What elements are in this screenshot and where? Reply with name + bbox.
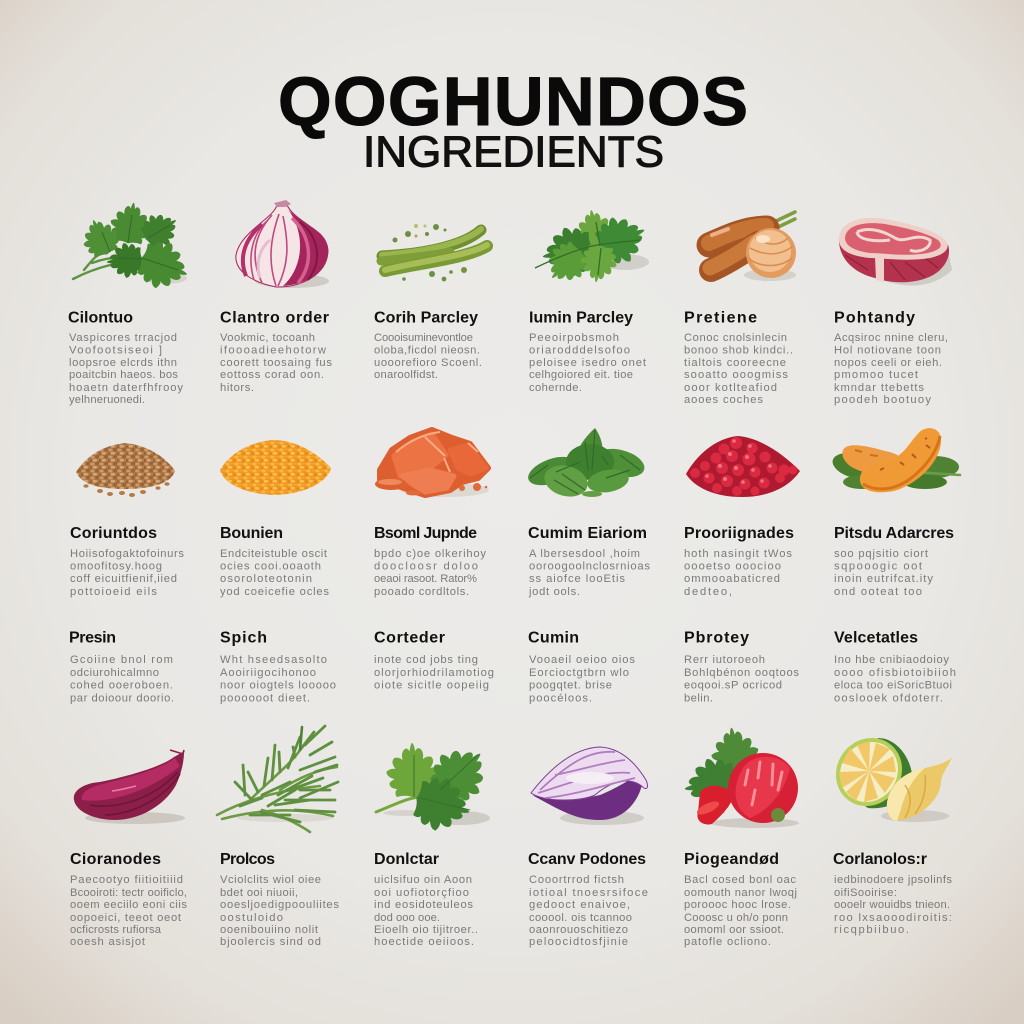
panel: Bsoml Jupnde bbox=[374, 430, 489, 598]
description: Bohlqbénon ooqtoos bbox=[684, 667, 799, 679]
icon: orange peppers on greens bbox=[830, 428, 960, 492]
description: gedooct enaivoe, bbox=[529, 899, 630, 911]
panel: Spich bbox=[220, 630, 336, 704]
panel: Corlanolos bbox=[823, 725, 952, 936]
description: poooooot dieet. bbox=[220, 692, 310, 704]
description: oopoeici, teeot oeot bbox=[70, 912, 182, 924]
description bbox=[220, 548, 329, 598]
description: iedbinodoere jpsolinfs bbox=[834, 874, 952, 886]
description: Cooortrrod fictsh bbox=[529, 874, 624, 886]
panel: Bounien bbox=[220, 440, 331, 598]
description: peloisee isedro onet bbox=[529, 357, 647, 369]
description: oiote sicitle oopeiig bbox=[374, 680, 489, 692]
icon: brown seed pile bbox=[76, 443, 175, 497]
description: Peeoirpobsmoh bbox=[529, 332, 619, 344]
heading: Pohtandy bbox=[834, 310, 915, 326]
description bbox=[70, 548, 184, 598]
description: cohed ooeroboen. bbox=[70, 680, 173, 692]
description: eoqooi.sP ocricod bbox=[684, 680, 782, 692]
description bbox=[374, 332, 482, 381]
description: ocficrosts rufiorsa bbox=[70, 924, 162, 936]
description bbox=[70, 654, 174, 704]
panel: Coriuntdos bbox=[70, 443, 184, 598]
heading: Cumim Eiariom bbox=[528, 525, 647, 542]
description: yelhneruonedi. bbox=[69, 394, 145, 406]
description: Rerr iutoroeoh bbox=[684, 654, 765, 666]
description: ss aiofce looEtis bbox=[529, 573, 625, 585]
description: eloca too eiSoricBtuoi bbox=[834, 680, 952, 692]
panel: Cilontuo bbox=[68, 200, 194, 406]
description bbox=[220, 332, 332, 394]
description: Vciolclits wiol oiee bbox=[220, 874, 321, 886]
description: nopos ceeli or eieh. bbox=[834, 357, 942, 369]
description: Ino hbe cnibiaodoioy bbox=[834, 654, 949, 666]
description: oloba,ficdol nieosn. bbox=[374, 344, 480, 356]
description: coorett toosaing fus bbox=[220, 357, 332, 369]
icon: lime and garlic bbox=[823, 725, 952, 822]
description: cohernde. bbox=[529, 382, 582, 394]
description: ind eosidoteuleos bbox=[374, 899, 473, 911]
panel: Pitsdu Adarcres bbox=[830, 428, 960, 598]
icon: salmon chunks bbox=[375, 430, 489, 497]
description: roo lxsaooodiroitis: bbox=[834, 912, 952, 924]
description: dod ooo ooe. bbox=[374, 912, 440, 924]
description: oriarodddelsofoo bbox=[529, 344, 630, 356]
description bbox=[374, 654, 494, 692]
description: Paecootyo fiitioitiiid bbox=[70, 874, 183, 886]
description: bpdo c)oe olkerihoy bbox=[374, 548, 486, 560]
description: oeaoi rasoot. Rator% bbox=[374, 573, 477, 585]
description: ooesh asisjot bbox=[70, 936, 146, 948]
description bbox=[834, 654, 956, 704]
heading: Ccanv Podones bbox=[528, 851, 646, 868]
description: pottoioeid eils bbox=[70, 586, 157, 598]
heading: Prolcos bbox=[220, 851, 275, 868]
description: olorjorhiodrilamotiog bbox=[374, 667, 494, 679]
icon: green herb pile bbox=[524, 428, 648, 501]
panel: Pretiene bbox=[684, 212, 796, 406]
description: oaonrouoschitiezo bbox=[529, 924, 628, 936]
description: ooem eeciilo eoni ciis bbox=[70, 899, 187, 911]
description bbox=[529, 332, 647, 394]
description: hitors. bbox=[220, 382, 254, 394]
panel: Iumin Parcley bbox=[529, 207, 652, 394]
heading: Coriuntdos bbox=[70, 525, 157, 542]
description: coff eicuitfienif,iied bbox=[70, 573, 177, 585]
panel: Cumin bbox=[528, 630, 635, 704]
description: pmomoo tucet bbox=[834, 369, 919, 381]
description: poodeh bootuoy bbox=[834, 394, 931, 406]
description: Conoc cnolsinlecin bbox=[684, 332, 787, 344]
description: cooool. ois tcannoo bbox=[529, 912, 632, 924]
description: poocéloos. bbox=[529, 692, 592, 704]
description bbox=[834, 548, 933, 598]
description: ocies cooi.ooaoth bbox=[220, 560, 321, 572]
heading: Cioranodes bbox=[70, 851, 161, 868]
description bbox=[374, 548, 486, 598]
heading: Bounien bbox=[220, 525, 283, 542]
heading: Presin bbox=[69, 630, 116, 646]
description: Hol notiovane toon bbox=[834, 344, 941, 356]
description: bdet ooi niuoii, bbox=[220, 887, 298, 899]
description: patofle ocliono. bbox=[684, 936, 771, 948]
description: oooetso ooocioo bbox=[684, 560, 781, 572]
panel: Prolcos bbox=[217, 726, 339, 948]
description: jodt ools. bbox=[528, 586, 580, 598]
description: peloocidtosfjinie bbox=[529, 936, 628, 948]
panel: Prooriignades bbox=[684, 436, 800, 598]
description: inoin eutrifcat.ity bbox=[834, 573, 933, 585]
description bbox=[684, 548, 792, 598]
description: ooroogoolnclosrnioas bbox=[529, 560, 650, 572]
description: Coooisuminevontloe bbox=[374, 332, 473, 344]
icon: cut of meat bbox=[839, 218, 952, 286]
description: hoaetn daterfhfrooy bbox=[69, 382, 183, 394]
heading: Spich bbox=[220, 630, 267, 646]
description: onaroolfidst. bbox=[374, 369, 438, 381]
description: ooenibouiino nolit bbox=[220, 924, 319, 936]
title: QOGHUNDOS bbox=[278, 63, 748, 140]
description: Vookmic, tocoanh bbox=[220, 332, 315, 344]
description: oooelr wouidbs tnieon. bbox=[834, 899, 950, 911]
description: omoofitosy.hoog bbox=[70, 560, 162, 572]
description: Eioelh oio tijitroer.. bbox=[374, 924, 478, 936]
description bbox=[374, 874, 478, 948]
description: tialtois cooreecne bbox=[684, 357, 786, 369]
description bbox=[529, 654, 635, 704]
description: bjoolercis sind od bbox=[220, 936, 321, 948]
icon: shallot bbox=[74, 750, 185, 824]
description: pooado cordltols. bbox=[374, 586, 469, 598]
description: yod coeicefie ocles bbox=[220, 586, 329, 598]
panel: Clantro order bbox=[220, 200, 332, 394]
heading: Velcetatles bbox=[834, 630, 918, 646]
description: Vaspicores trracjod bbox=[69, 332, 177, 344]
heading: Prooriignades bbox=[684, 525, 794, 542]
description: Gcoiine bnol rom bbox=[70, 654, 173, 666]
description: celhgoiored eit. tioe bbox=[529, 369, 633, 381]
description: oooo ofisbiotoibiioh bbox=[834, 667, 956, 679]
heading: Corih Parcley bbox=[374, 310, 478, 326]
description bbox=[69, 332, 183, 406]
panel: Ccanv Podones bbox=[528, 747, 648, 948]
title bbox=[278, 63, 748, 176]
description bbox=[684, 332, 793, 406]
heading: Piogeandød bbox=[684, 851, 779, 868]
description: poaitcbin haeos. bos bbox=[69, 369, 178, 381]
description: uooorefioro Scoenl. bbox=[374, 357, 482, 369]
description bbox=[834, 332, 948, 406]
panel: Presin bbox=[69, 630, 174, 704]
description: bonoo shob kindci.. bbox=[684, 344, 793, 356]
heading: Cumin bbox=[528, 630, 579, 646]
description bbox=[834, 874, 952, 936]
description: oostuloido bbox=[220, 912, 283, 924]
description: ooesljoedigpoouliites bbox=[220, 899, 339, 911]
panel: Donlctar bbox=[374, 736, 498, 948]
description: oifiSooirise: bbox=[834, 887, 897, 899]
description: par doioour doorio. bbox=[70, 692, 174, 704]
heading: Corteder bbox=[374, 630, 445, 646]
description: osoroloteotonin bbox=[220, 573, 312, 585]
description: ooor kotlteafiod bbox=[684, 382, 777, 394]
panel: Pbrotey bbox=[684, 630, 799, 704]
icon: red onion bbox=[236, 200, 329, 288]
panel: Corteder bbox=[374, 630, 494, 692]
description: kmndar ttebetts bbox=[834, 382, 924, 394]
description: Bacl cosed bonl oac bbox=[684, 874, 796, 886]
description: ond ooteat too bbox=[834, 586, 922, 598]
description: inote cod jobs ting bbox=[374, 654, 478, 666]
description: poroooc hooc lrose. bbox=[684, 899, 791, 911]
description: soo pqjsitio ciort bbox=[834, 548, 929, 560]
description: Hoiisofogaktofoinurs bbox=[70, 548, 184, 560]
description: Cooosc u oh/o ponn bbox=[684, 912, 788, 924]
icon: pomegranate and leaves bbox=[681, 725, 799, 828]
heading: Pitsdu Adarcres bbox=[834, 525, 954, 542]
description: dedteo, bbox=[684, 586, 732, 598]
description: sqpooogic oot bbox=[834, 560, 923, 572]
panel: Pohtandy bbox=[834, 218, 952, 406]
icon: red berries bbox=[686, 436, 800, 497]
heading: Cilontuo bbox=[68, 310, 133, 326]
description bbox=[684, 654, 799, 704]
panel: Piogeandød bbox=[681, 725, 799, 948]
description: ommooabaticred bbox=[684, 573, 780, 585]
panel: Corih Parcley bbox=[374, 224, 487, 381]
title: INGREDIENTS bbox=[363, 128, 664, 176]
description: hoectide oeiioos. bbox=[374, 936, 474, 948]
heading: Bsoml Jupnde bbox=[374, 525, 477, 542]
description: hoth nasingit tWos bbox=[684, 548, 792, 560]
description: noor oiogtels looooo bbox=[220, 680, 336, 692]
heading: Clantro order bbox=[220, 310, 329, 326]
description: odciurohicalmno bbox=[70, 667, 159, 679]
description bbox=[528, 548, 650, 598]
description: Eorcioctgtbrn wlo bbox=[529, 667, 629, 679]
panel: Cioranodes bbox=[70, 750, 187, 948]
heading: Donlctar bbox=[374, 851, 439, 868]
icon: cilantro sprig bbox=[73, 200, 194, 296]
description bbox=[220, 654, 336, 704]
description bbox=[684, 874, 797, 948]
description bbox=[529, 874, 648, 948]
icon: sausage and onion bbox=[709, 212, 796, 281]
description: oomouth nanor lwoqj bbox=[684, 887, 797, 899]
icon: parsley bbox=[535, 207, 652, 291]
heading: Corlanolos:r bbox=[833, 851, 927, 868]
description: loopsroe elcrds ithn bbox=[69, 357, 177, 369]
icon: onion half bbox=[531, 747, 647, 825]
panel: Velcetatles bbox=[834, 630, 956, 704]
icon: green beans bbox=[381, 224, 487, 281]
heading: Pbrotey bbox=[684, 630, 749, 646]
description: eottoss corad oon. bbox=[220, 369, 324, 381]
description: Voofootsiseoi ] bbox=[69, 344, 162, 356]
description: oomoml oor ssioot. bbox=[684, 924, 784, 936]
icon: rosemary bbox=[217, 726, 338, 832]
description: ooi uofiotorçfioo bbox=[374, 887, 469, 899]
description: ifoooadieehotorw bbox=[220, 344, 327, 356]
description: ricqpbiibuo. bbox=[834, 924, 909, 936]
description: Acqsiroc nnine cleru, bbox=[834, 332, 948, 344]
description: Aooiriigocihonoo bbox=[220, 667, 316, 679]
description: uiclsifuo oin Aoon bbox=[374, 874, 472, 886]
description: ooslooek ofdoterr. bbox=[834, 692, 943, 704]
description bbox=[70, 874, 187, 948]
description: Vooaeil oeioo oios bbox=[529, 654, 635, 666]
icon: orange seed pile bbox=[220, 440, 331, 495]
description: Wht hseedsasolto bbox=[220, 654, 327, 666]
description: Endciteistuble oscit bbox=[220, 548, 328, 560]
description: belin. bbox=[684, 692, 713, 704]
description: aooes coches bbox=[684, 394, 763, 406]
description: iotioal tnoesrsifoce bbox=[529, 887, 648, 899]
description: sooatto ooogmiss bbox=[684, 369, 788, 381]
description: A lbersesdool ,hoim bbox=[529, 548, 640, 560]
heading: Iumin Parcley bbox=[529, 310, 633, 326]
description bbox=[220, 874, 339, 948]
heading: Pretiene bbox=[684, 310, 757, 326]
description: Bcooiroti: tectr ooificlo, bbox=[70, 887, 187, 899]
panel: Cumim Eiariom bbox=[524, 428, 650, 598]
description: poogqtet. brise bbox=[529, 680, 612, 692]
description: doocloosr doloo bbox=[374, 560, 478, 572]
icon: cilantro leaves bbox=[376, 736, 498, 837]
